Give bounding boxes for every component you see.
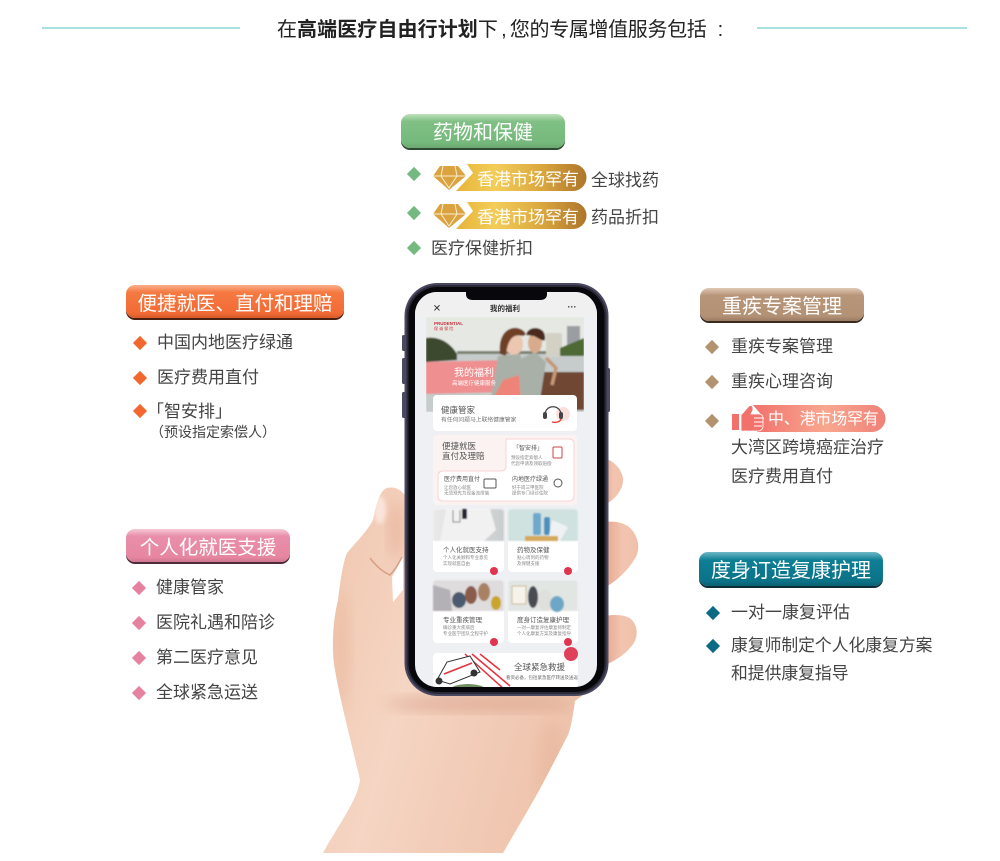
app top bar: ··· bbox=[568, 302, 576, 312]
tile: rehabilitation bbox=[508, 580, 578, 646]
app top bar: 我的福利 bbox=[490, 303, 520, 313]
heading: critical illness bbox=[700, 288, 864, 321]
title: , bbox=[501, 19, 507, 41]
heading: critical illness: 重疾专案管理 bbox=[722, 296, 842, 318]
panel: personalised support bbox=[126, 529, 290, 702]
card: direct billing: 便捷就医 bbox=[442, 441, 477, 451]
bullet bbox=[705, 340, 719, 354]
tile: personalised support: 实现就医自由 bbox=[443, 560, 470, 567]
text: assessment: 一对一康复评估 bbox=[731, 603, 850, 622]
card: global emergency bbox=[433, 653, 578, 687]
heading: rehabilitation: 度身订造复康护理 bbox=[711, 560, 871, 582]
tile: critical illness: 专业重疾管理 bbox=[443, 615, 482, 624]
bullet bbox=[133, 336, 147, 350]
rare badge: thumbs up bbox=[732, 405, 886, 432]
card: health manager: 健康管家 bbox=[441, 405, 476, 415]
text: mainland green channel: 中国内地医疗绿通 bbox=[157, 333, 293, 352]
tile: medicine: 药物及保健 bbox=[517, 545, 550, 554]
phone bbox=[402, 283, 610, 704]
gap between thumb and palm bbox=[392, 557, 403, 602]
bullet bbox=[705, 414, 719, 428]
card: direct billing: 「智安排」 bbox=[513, 444, 543, 452]
heading: rehabilitation bbox=[699, 552, 883, 586]
text: direct billing: 医疗费用直付 bbox=[731, 467, 833, 486]
palm bbox=[323, 487, 590, 853]
hand bbox=[323, 458, 638, 853]
tile: rehabilitation: 个人化康复方案及康复指导 bbox=[517, 630, 571, 637]
heading: personalised support bbox=[126, 529, 290, 562]
hero photo: 保 诚 保 险 bbox=[434, 325, 453, 331]
text: global drug search: 全球找药 bbox=[591, 171, 659, 190]
text: drug discount: 药品折扣 bbox=[591, 208, 659, 227]
text: personalised plan: 康复师制定个人化康复方案 bbox=[731, 636, 932, 655]
bullet bbox=[407, 206, 421, 220]
card: direct billing: 无须预先为现金流烦恼 bbox=[444, 490, 489, 496]
rare badge 1 bbox=[433, 164, 586, 191]
tile: medicine bbox=[508, 509, 578, 575]
text: counselling: 重疾心理咨询 bbox=[731, 372, 833, 391]
hero photo: PRUDENTIAL bbox=[434, 321, 463, 326]
card: direct billing: 让您放心就医 bbox=[444, 484, 471, 491]
text: smart arrangement: 「智安排」 bbox=[147, 402, 232, 421]
rare badge 1: 香港市场罕有 bbox=[477, 170, 579, 189]
card: direct billing: 直付及理赔 bbox=[442, 451, 485, 461]
tile: critical illness: 专业医学团队全程守护 bbox=[443, 630, 488, 637]
bullet bbox=[133, 404, 147, 418]
app top bar bbox=[415, 292, 597, 314]
rare badge: thumbs up: 中、港市场罕有 bbox=[768, 410, 879, 428]
rare badge 2 bbox=[433, 202, 586, 229]
card: direct billing: 提供专门绿诊住院 bbox=[512, 490, 548, 496]
card: health manager bbox=[433, 395, 577, 431]
call button bbox=[564, 647, 578, 661]
bullet bbox=[706, 639, 720, 653]
phone body bbox=[404, 283, 608, 696]
text: hospital concierge: 医院礼遇和陪诊 bbox=[156, 613, 275, 632]
bullet bbox=[407, 241, 421, 255]
card: health manager: 有任何问题马上联络健康管家 bbox=[441, 416, 517, 424]
header line left bbox=[42, 27, 240, 29]
phone buttons bbox=[402, 335, 610, 418]
text: cross-border treatment: 大湾区跨境癌症治疗 bbox=[731, 438, 884, 457]
title: : bbox=[718, 19, 723, 41]
panel: critical illness management bbox=[700, 288, 886, 486]
tile: rehabilitation: 一对一康复评估康复师制定 bbox=[517, 624, 571, 631]
fingers bbox=[600, 458, 638, 666]
app top bar: ✕ bbox=[433, 304, 441, 314]
screen bbox=[415, 292, 597, 704]
bullet bbox=[706, 606, 720, 620]
card: direct billing: 预设指定索偿人 bbox=[511, 454, 543, 461]
text: direct billing: 医疗费用直付 bbox=[157, 368, 259, 387]
text: health manager: 健康管家 bbox=[156, 578, 224, 597]
hero photo: 我的福利 bbox=[454, 366, 494, 379]
text: case management: 重疾专案管理 bbox=[731, 337, 833, 356]
title: 在高端医疗自由行计划下 您的专属增值服务包括 bbox=[277, 19, 706, 41]
heading: medicine and health: 药物和保健 bbox=[433, 122, 533, 144]
tile: medicine: 及保健支援 bbox=[517, 560, 540, 567]
illustration: hand holding phone bbox=[323, 283, 638, 853]
bullet bbox=[132, 651, 146, 665]
tile: personalised support: 个人化就医支持 bbox=[443, 545, 489, 554]
heading: access and billing: 便捷就医、直付和理赔 bbox=[137, 292, 332, 314]
panel: access, direct billing, claims bbox=[126, 285, 344, 440]
tile: medicine: 贴心周到的药物 bbox=[517, 554, 549, 561]
rare badge 2: 香港市场罕有 bbox=[477, 208, 579, 227]
tile: rehabilitation: 度身订造复康护理 bbox=[517, 615, 570, 624]
tile: critical illness bbox=[433, 580, 504, 646]
header line right bbox=[757, 27, 967, 29]
bullet bbox=[132, 581, 146, 595]
bullet bbox=[407, 167, 421, 181]
heading: medicine and health bbox=[401, 114, 565, 148]
tile: critical illness: 确诊重大疾病后 bbox=[443, 624, 475, 631]
bullet bbox=[133, 371, 147, 385]
card: direct billing: 好于岗三甲医院 bbox=[512, 484, 544, 491]
card: global emergency: 全球紧急救援 bbox=[514, 662, 566, 672]
text: nominee note: （预设指定索偿人） bbox=[150, 424, 276, 440]
card: direct billing: 内地医疗绿通 bbox=[512, 475, 548, 483]
heading: access and billing bbox=[126, 285, 344, 318]
card: global emergency: 看资必备，包括紧急医疗转送及送返 bbox=[506, 674, 578, 681]
text: healthcare discount: 医疗保健折扣 bbox=[431, 239, 533, 258]
card: direct billing: 代您申请及领取赔偿 bbox=[511, 460, 552, 467]
text: second opinion: 第二医疗意见 bbox=[156, 648, 258, 667]
bullet bbox=[705, 375, 719, 389]
heading: personalised support: 个人化就医支援 bbox=[140, 536, 276, 558]
tile: personalised support bbox=[433, 509, 504, 575]
text: guidance: 和提供康复指导 bbox=[731, 664, 848, 683]
panel: medicine and health bbox=[401, 114, 659, 258]
hero photo: 高端医疗健康服务 bbox=[452, 379, 496, 387]
hero photo bbox=[426, 317, 584, 412]
panel: tailored rehabilitation bbox=[699, 552, 932, 683]
notch bbox=[466, 291, 547, 300]
tile: personalised support: 个人化关顾和专业意见 bbox=[443, 554, 488, 561]
bullet bbox=[132, 686, 146, 700]
bullet bbox=[132, 616, 146, 630]
card: direct billing: 医疗费用直付 bbox=[444, 475, 480, 483]
card: direct billing bbox=[433, 435, 577, 505]
text: emergency transport: 全球紧急运送 bbox=[156, 683, 258, 702]
